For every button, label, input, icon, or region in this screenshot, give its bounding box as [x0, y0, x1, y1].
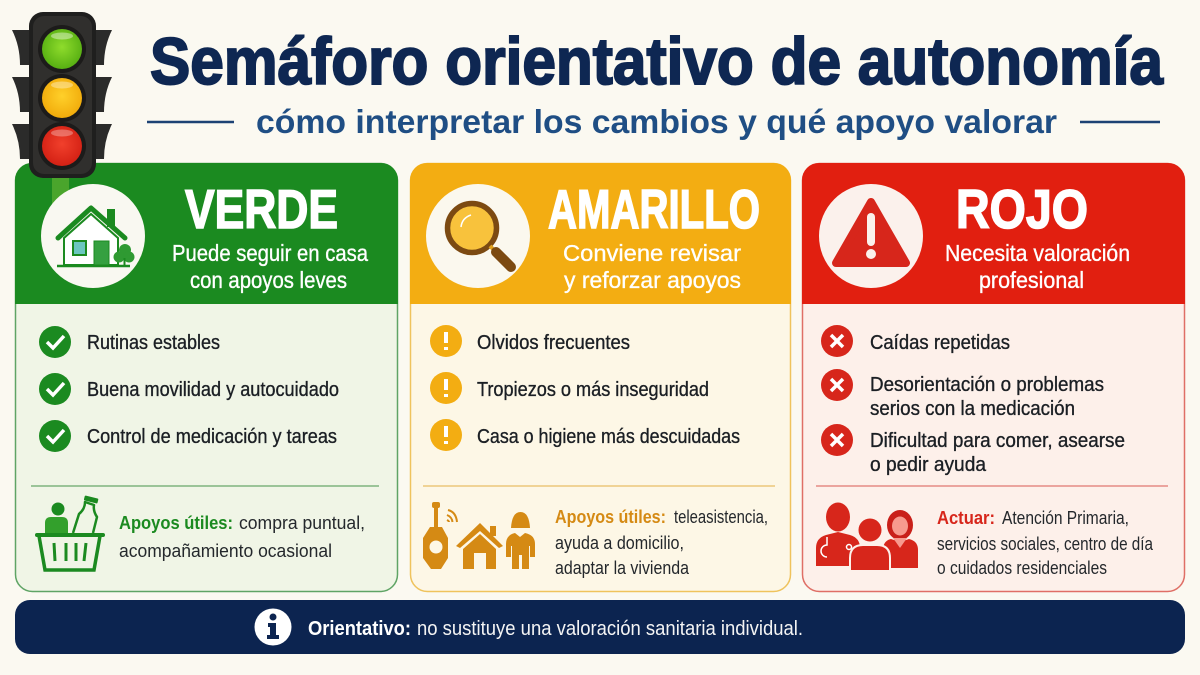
panel: verde — [15, 163, 398, 592]
footer text: Orientativo: — [308, 618, 411, 640]
item: caídas: Caídas repetidas — [870, 332, 1010, 354]
item: dificultad: o pedir ayuda — [870, 454, 987, 476]
item: casa: Casa o higiene más descuidadas — [477, 426, 740, 448]
amarillo subtitle — [563, 240, 741, 293]
verde header band — [15, 163, 398, 304]
amarillo header band — [410, 163, 791, 304]
verde subtitle: con apoyos leves — [190, 267, 347, 293]
amarillo subtitle: Conviene revisar — [563, 240, 741, 266]
verde subtitle: Puede seguir en casa — [172, 240, 368, 266]
item: movilidad — [39, 373, 339, 405]
item: olvidos: Olvidos frecuentes — [477, 332, 630, 354]
verde heading: VERDE — [185, 178, 338, 240]
item: rutinas — [39, 326, 220, 358]
rojo support text — [937, 507, 1154, 578]
item: medicación — [39, 420, 337, 452]
panel: amarillo — [410, 163, 791, 592]
pole — [52, 176, 69, 210]
icon: traffic light — [12, 12, 112, 178]
item: olvidos — [430, 325, 630, 357]
amarillo support text — [555, 506, 768, 578]
item: rutinas: Rutinas estables — [87, 332, 220, 354]
icon: house — [41, 184, 145, 288]
item: desorientación: serios con la medicación — [870, 398, 1075, 420]
item: movilidad: Buena movilidad y autocuidado — [87, 379, 339, 401]
panel: rojo — [802, 163, 1185, 592]
rojo support text: o cuidados residenciales — [937, 557, 1107, 578]
footer note — [15, 600, 1185, 654]
rojo panel body — [802, 164, 1184, 592]
rojo support text: Atención Primaria, — [1002, 507, 1129, 528]
verde panel body — [16, 164, 398, 592]
item: medicación: Control de medicación y tareas — [87, 426, 337, 448]
rojo subtitle: Necesita valoración — [945, 240, 1130, 266]
rojo heading: ROJO — [956, 178, 1088, 240]
amarillo heading: AMARILLO — [548, 178, 760, 240]
item: desorientación — [821, 369, 1104, 420]
rojo header band — [802, 163, 1185, 304]
item: casa — [430, 419, 740, 451]
item: tropiezos: Tropiezos o más inseguridad — [477, 379, 709, 401]
verde support text — [119, 512, 365, 561]
footer text body: no sustituye una valoración sanitaria individual. — [417, 618, 803, 640]
amarillo subtitle: y reforzar apoyos — [564, 267, 741, 293]
rojo support text: servicios sociales, centro de día — [937, 533, 1154, 554]
rojo subtitle — [945, 240, 1130, 293]
amarillo support text: teleasistencia, — [674, 506, 768, 527]
rojo support text: Actuar: — [937, 507, 995, 528]
amarillo support text: ayuda a domicilio, — [555, 532, 684, 553]
amarillo support text: adaptar la vivienda — [555, 557, 690, 578]
verde support text: Apoyos útiles: — [119, 512, 233, 533]
amarillo checklist — [430, 325, 740, 451]
subtitle: cómo interpretar los cambios y qué apoyo valorar — [256, 103, 1057, 140]
item: tropiezos — [430, 372, 709, 404]
amarillo panel body — [410, 164, 790, 592]
amarillo support text: Apoyos útiles: — [555, 506, 666, 527]
icon: alarm, house and person — [423, 502, 535, 569]
rojo checklist — [821, 325, 1125, 476]
item: caídas — [821, 325, 1010, 357]
icon: info — [254, 608, 292, 646]
item: dificultad: Dificultad para comer, asearse — [870, 430, 1125, 452]
icon: magnifier — [426, 184, 530, 288]
rojo subtitle: profesional — [979, 267, 1084, 293]
verde support text: acompañamiento ocasional — [119, 540, 332, 561]
icon: basket — [37, 495, 103, 570]
verde subtitle — [172, 240, 368, 293]
verde checklist — [39, 326, 339, 452]
verde support text: compra puntual, — [239, 512, 365, 533]
icon: professionals — [816, 502, 918, 571]
item: dificultad — [821, 424, 1125, 476]
icon: warning triangle — [819, 184, 923, 288]
item: desorientación: Desorientación o problemas — [870, 374, 1104, 396]
